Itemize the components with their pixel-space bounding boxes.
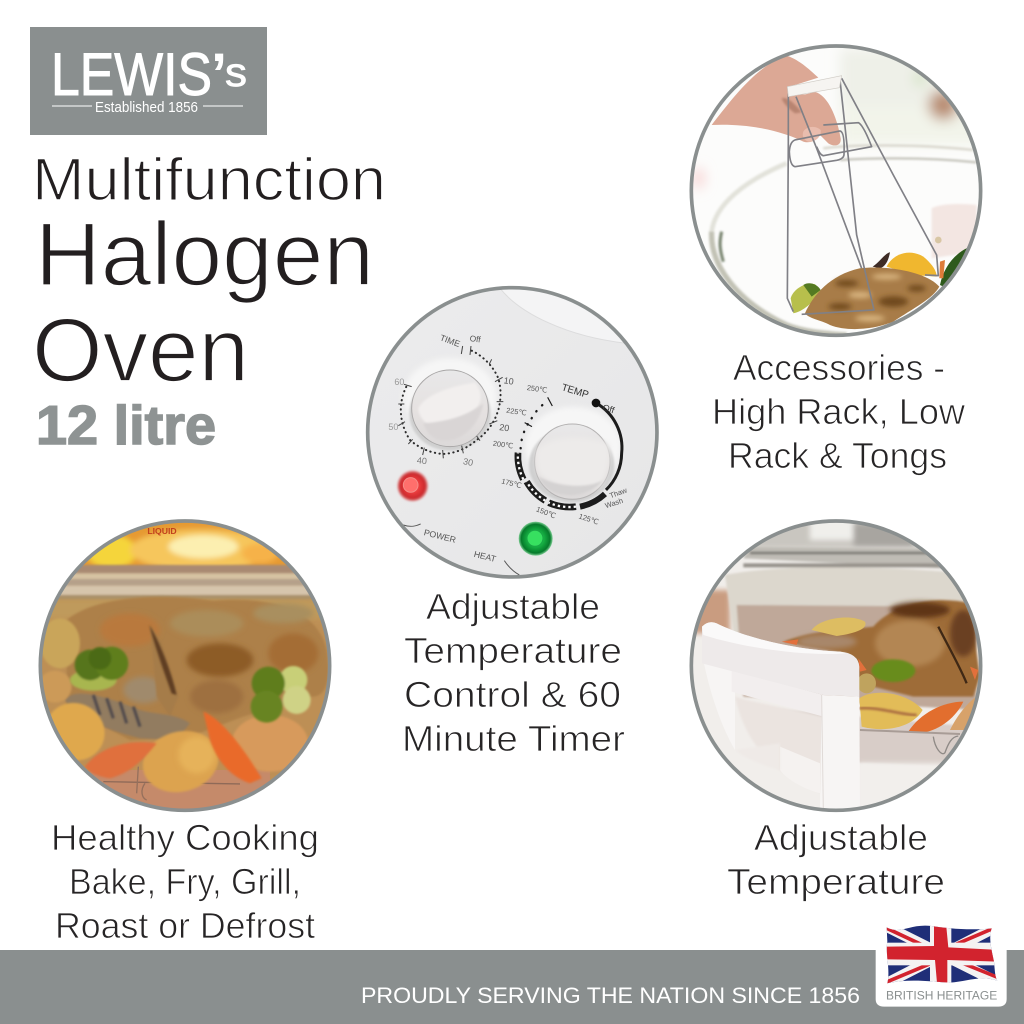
timer labels: 20 xyxy=(499,422,510,433)
panel: oven with food on rack photo xyxy=(690,519,982,812)
temperature labels: 200℃ xyxy=(492,439,514,450)
temperature labels: Wash xyxy=(604,496,624,510)
glass rim xyxy=(58,564,311,600)
power and heat labels: POWER xyxy=(423,527,457,545)
caption: healthy cooking: Healthy Cooking xyxy=(51,817,319,858)
title: Multifunction xyxy=(32,146,386,213)
timer knob xyxy=(412,370,488,447)
caption: temperature control and timer: Temperature xyxy=(404,630,622,671)
caption: accessories: High Rack, Low xyxy=(712,391,966,432)
title xyxy=(32,146,386,401)
caption: healthy cooking: Roast or Defrost xyxy=(55,905,315,946)
tongs xyxy=(787,78,938,314)
temperature labels: TEMP xyxy=(560,382,590,401)
panel: roast chicken photo xyxy=(38,519,332,812)
tongs white handle xyxy=(787,76,842,97)
caption: temperature control and timer: Adjustable xyxy=(426,586,600,627)
temperature knob xyxy=(535,424,610,499)
liquid marking: LIQUID xyxy=(147,526,177,536)
logo: Lewis's: ’ xyxy=(211,42,227,107)
timer labels: TIME xyxy=(439,332,462,349)
temperature labels: 225℃ xyxy=(506,406,527,417)
caption: healthy cooking xyxy=(51,817,319,946)
caption: accessories xyxy=(712,347,966,476)
heat indicator light xyxy=(519,522,553,556)
caption: adjustable temperature: Adjustable xyxy=(754,817,928,858)
timer labels: Off xyxy=(469,333,482,345)
potatoes xyxy=(35,618,308,801)
logo: Lewis's: Established 1856 xyxy=(95,100,198,116)
hand xyxy=(712,56,841,145)
timer labels xyxy=(388,332,514,468)
temperature labels: Thaw xyxy=(608,485,629,500)
white oven stand xyxy=(702,622,860,810)
temperature labels: Off xyxy=(601,402,616,416)
chicken xyxy=(30,597,340,740)
panel: accessories photo with tongs xyxy=(690,44,982,338)
food xyxy=(791,248,970,329)
logo: Lewis's: s xyxy=(225,49,247,95)
chicken and vegetables xyxy=(782,600,980,733)
power indicator light xyxy=(397,471,428,501)
timer scale xyxy=(398,346,503,458)
timer labels: 60 xyxy=(394,377,404,387)
caption: healthy cooking: Bake, Fry, Grill, xyxy=(69,861,301,902)
timer labels: 10 xyxy=(503,375,514,387)
caption: adjustable temperature xyxy=(727,817,945,902)
logo: Lewis's: LEWIS xyxy=(51,41,212,108)
timer labels: 40 xyxy=(416,455,427,466)
power and heat labels: HEAT xyxy=(473,549,498,564)
carrots xyxy=(85,712,262,783)
temperature labels: 175℃ xyxy=(501,477,523,490)
glass bowl xyxy=(725,547,977,767)
caption: temperature control and timer: Control & 60 xyxy=(404,674,621,715)
timer labels: 30 xyxy=(462,456,474,468)
subtitle: 12 litre: 12 litre xyxy=(36,394,216,456)
caption: adjustable temperature: Temperature xyxy=(727,861,945,902)
broccoli xyxy=(70,647,311,723)
footer bar xyxy=(0,950,1024,1024)
caption: accessories: Rack & Tongs xyxy=(728,435,947,476)
oven white part xyxy=(932,204,977,258)
temperature scale xyxy=(518,397,622,507)
caption: temperature control and timer xyxy=(402,586,625,759)
rack and base xyxy=(90,766,270,808)
badge: British Heritage: BRITISH HERITAGE xyxy=(886,988,997,1002)
icon: union flag xyxy=(886,926,998,984)
badge: British Heritage xyxy=(876,918,1007,1007)
glass bowl xyxy=(712,145,977,335)
rack xyxy=(860,730,960,754)
caption: temperature control and timer: Minute Timer xyxy=(402,718,625,759)
logo: Lewis's xyxy=(30,27,267,135)
temperature labels: 150℃ xyxy=(535,504,557,520)
temperature labels: 125℃ xyxy=(578,512,600,527)
power and heat labels xyxy=(403,524,519,575)
panel: timer and temperature control dial xyxy=(366,286,659,579)
title: Halogen xyxy=(35,205,374,305)
temperature labels xyxy=(492,382,629,527)
temperature labels: 250℃ xyxy=(526,383,548,395)
title: Oven xyxy=(32,301,249,401)
timer labels: 50 xyxy=(388,422,398,432)
footer bar: PROUDLY SERVING THE NATION SINCE 1856 xyxy=(361,983,860,1008)
caption: accessories: Accessories - xyxy=(733,347,945,388)
